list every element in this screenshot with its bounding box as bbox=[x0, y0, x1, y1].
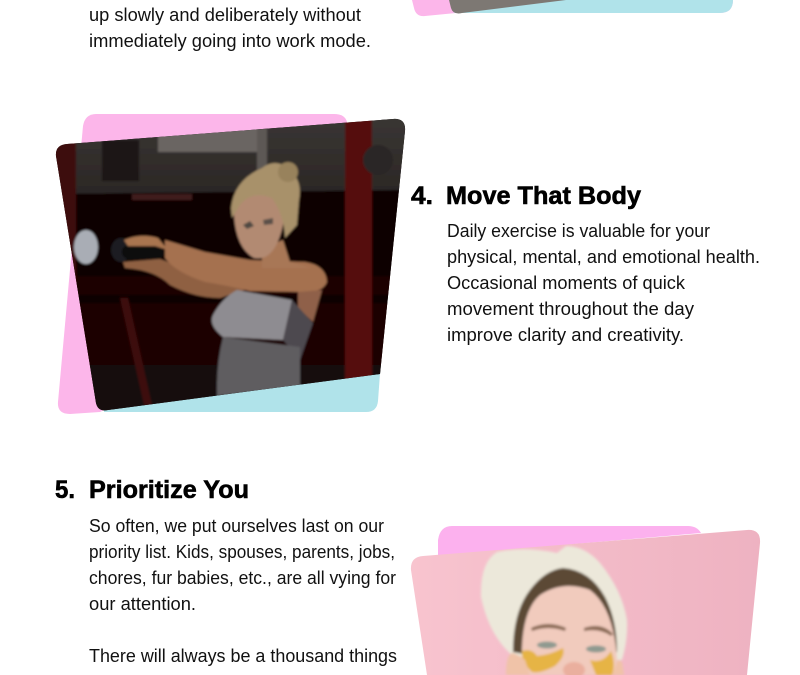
section 4 body text bbox=[447, 221, 760, 345]
nose bbox=[563, 662, 585, 675]
eyebrows bbox=[531, 624, 566, 631]
eye bbox=[243, 221, 254, 229]
towel bbox=[481, 546, 627, 660]
section 3 text ending: immediately going into work mode. bbox=[89, 31, 371, 51]
hair bbox=[231, 163, 300, 238]
pink backing shape bbox=[58, 114, 347, 414]
hands bbox=[124, 236, 168, 250]
section 4 heading: Move That Body bbox=[446, 182, 641, 210]
section 4 body text: Daily exercise is valuable for your bbox=[447, 221, 710, 241]
eyes bbox=[537, 642, 557, 648]
section 5 body text bbox=[89, 516, 397, 666]
photo: woman with towel and eye patches bbox=[405, 525, 765, 675]
section 5 image group bbox=[405, 525, 765, 675]
tank top bbox=[212, 290, 292, 340]
section 5 heading: 5. bbox=[55, 476, 75, 504]
eye patches bbox=[522, 648, 564, 672]
hands bbox=[506, 653, 530, 675]
hair bbox=[513, 568, 617, 655]
section 5 body text: chores, fur babies, etc., are all vying for bbox=[89, 568, 396, 588]
section 4 image group bbox=[50, 114, 410, 420]
section 5 body text: priority list. Kids, spouses, parents, jobs, bbox=[89, 542, 395, 562]
section 5 heading: Prioritize You bbox=[89, 476, 249, 504]
section 5 body text: So often, we put ourselves last on our bbox=[89, 516, 384, 536]
photo: woman lifting a kettlebell bbox=[50, 115, 410, 420]
section 4 body text: movement throughout the day bbox=[447, 299, 694, 319]
section 5 body text: There will always be a thousand things bbox=[89, 646, 397, 666]
section 4 body text: improve clarity and creativity. bbox=[447, 325, 684, 345]
section 3 text ending: up slowly and deliberately without bbox=[89, 5, 361, 25]
section 4 body text: Occasional moments of quick bbox=[447, 273, 686, 293]
blue backing shape bbox=[104, 360, 381, 412]
section 4 body text: physical, mental, and emotional health. bbox=[447, 247, 760, 267]
kettlebell bbox=[74, 230, 98, 264]
neck and shoulder bbox=[260, 238, 292, 264]
upper arm bbox=[165, 240, 327, 292]
face bbox=[522, 586, 618, 675]
section 4 heading: 4. bbox=[411, 182, 433, 210]
head bbox=[234, 189, 283, 258]
section 3 photo remainder bbox=[412, 0, 733, 16]
pink backing shape bbox=[438, 526, 701, 556]
section 3 text ending bbox=[89, 5, 371, 51]
lower arm bbox=[123, 259, 245, 298]
section 5 body text: our attention. bbox=[89, 594, 196, 614]
